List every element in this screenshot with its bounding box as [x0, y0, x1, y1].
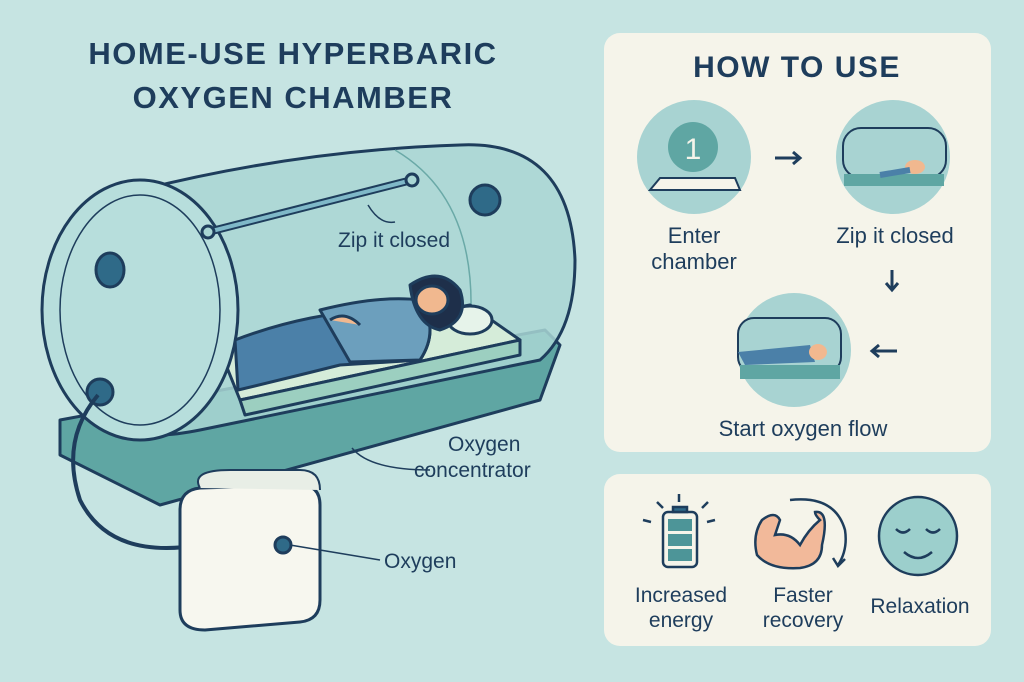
arrow down	[886, 270, 898, 290]
step 1	[637, 100, 751, 274]
icon: muscle	[755, 499, 846, 568]
labels: Oxygen	[448, 433, 520, 456]
step 2: Zip it closed	[836, 223, 954, 248]
step 3: Start oxygen flow	[719, 416, 887, 441]
panel: benefits: recovery	[763, 609, 844, 632]
step 1: 1	[685, 133, 701, 166]
zipper rod	[208, 180, 412, 232]
front end cap	[42, 180, 238, 440]
arrow right	[775, 152, 800, 164]
illustration: hyperbaric chamber	[42, 145, 575, 630]
step 1: chamber	[651, 249, 737, 274]
title: OXYGEN CHAMBER	[133, 80, 453, 115]
step 1: Enter	[668, 223, 720, 248]
title: HOME-USE HYPERBARIC	[88, 36, 498, 71]
panel: benefits	[604, 474, 991, 646]
oxygen concentrator	[180, 485, 320, 630]
panel: benefits: Relaxation	[870, 595, 970, 618]
title	[88, 36, 498, 115]
step 2	[836, 100, 954, 248]
panel: benefits: Increased	[635, 584, 727, 607]
chamber body	[140, 145, 575, 435]
labels: Zip it closed	[338, 229, 450, 252]
callout lines	[368, 205, 395, 222]
panel: benefits: energy	[649, 609, 714, 632]
step 3	[719, 293, 887, 441]
mattress	[220, 305, 520, 400]
arrow left	[872, 345, 897, 357]
icon: relaxed face	[879, 497, 957, 575]
chamber base	[60, 330, 560, 505]
labels: concentrator	[414, 459, 531, 482]
panel: how to use	[604, 33, 991, 452]
icon: battery	[643, 494, 715, 567]
person	[235, 300, 430, 390]
panel: benefits: Faster	[773, 584, 833, 607]
heading: how to use: HOW TO USE	[693, 51, 901, 84]
labels	[338, 229, 531, 573]
hose	[73, 395, 200, 548]
labels: Oxygen	[384, 550, 456, 573]
